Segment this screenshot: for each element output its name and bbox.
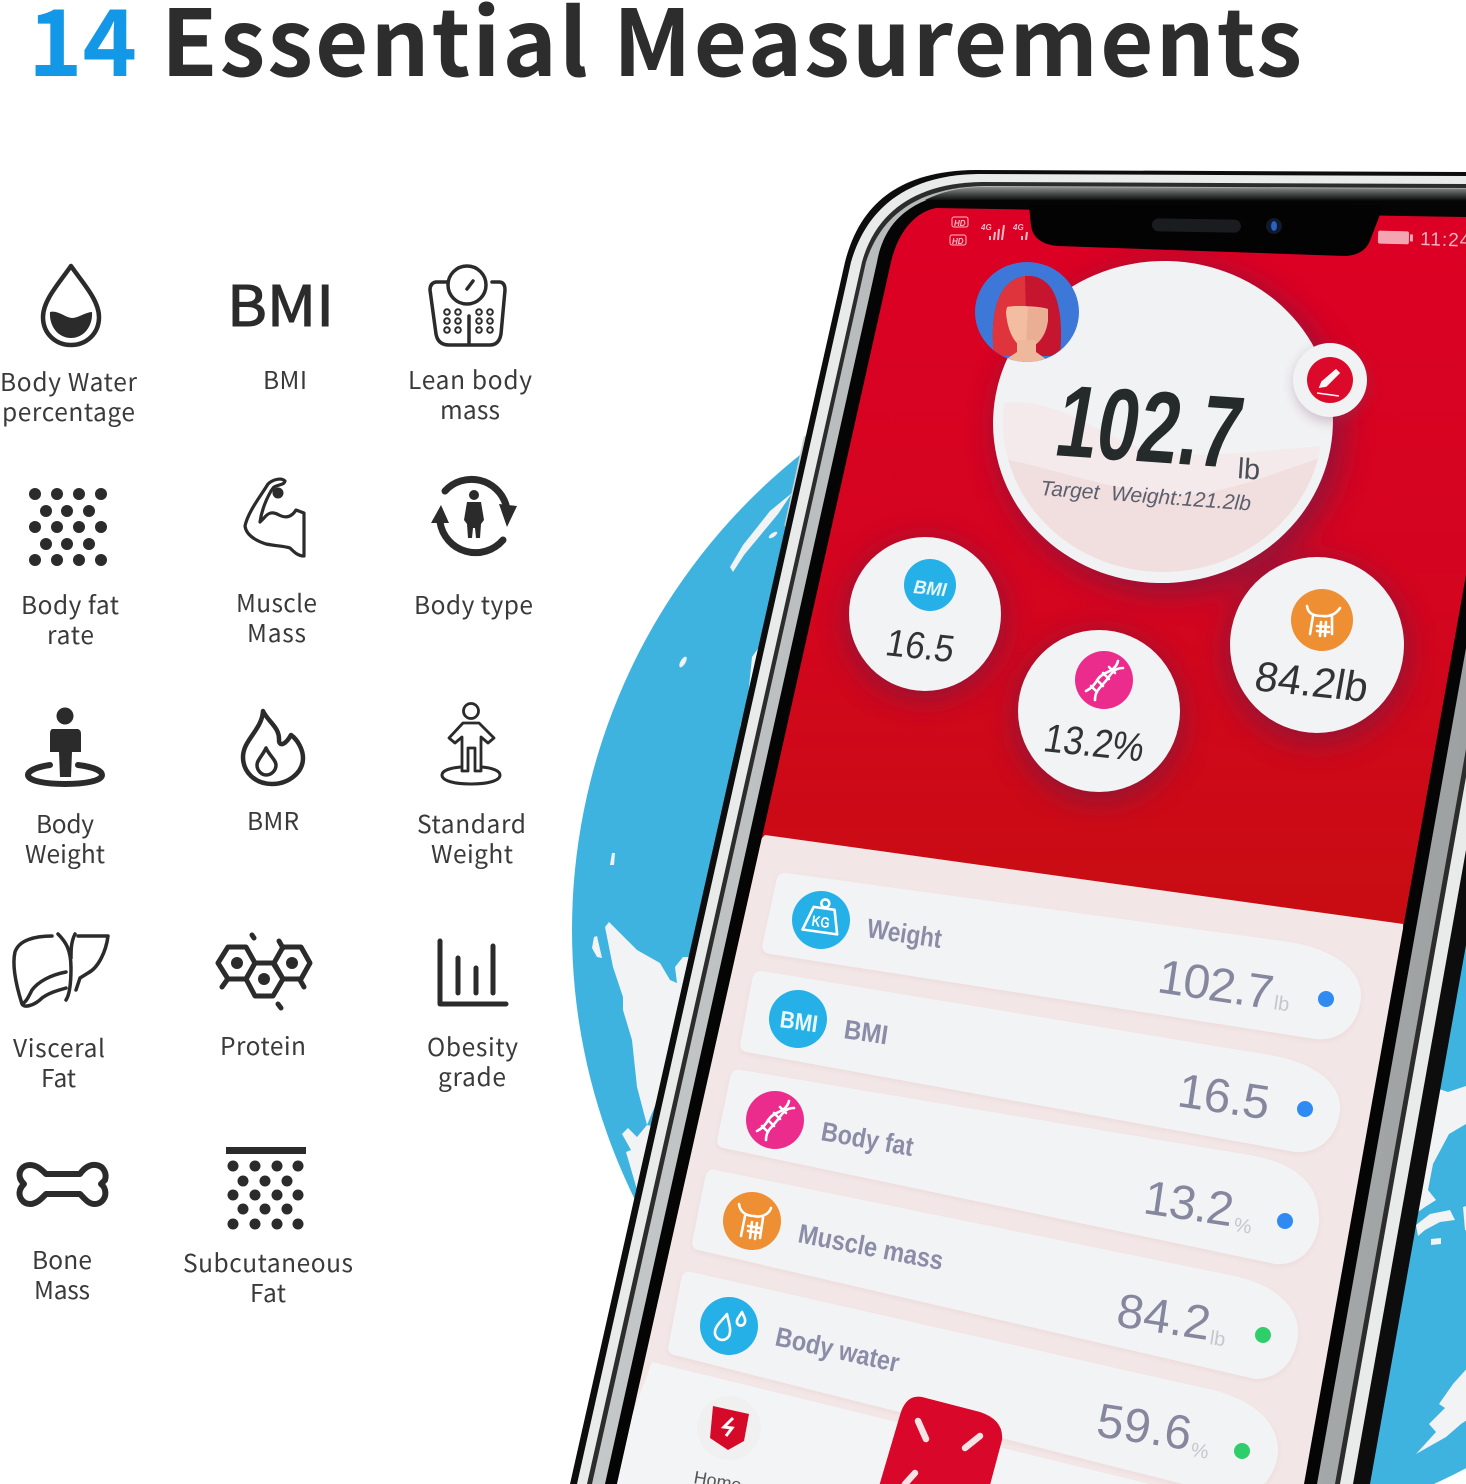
status icons left: 4G <box>1012 223 1024 232</box>
measurement: bone mass: Mass <box>34 1272 90 1307</box>
avatar <box>975 262 1079 362</box>
measurement: muscle mass <box>236 479 317 650</box>
torso icon <box>1307 606 1340 636</box>
icon: outlined person on ring <box>442 704 500 784</box>
measurement: standard weight: Standard <box>417 806 526 841</box>
status icons left: 4G <box>980 223 992 232</box>
measurement: bone mass: Bone <box>32 1242 92 1277</box>
row: body water: Body water <box>773 1322 903 1378</box>
measurement: body weight: Weight <box>25 836 105 871</box>
dna icon <box>1086 661 1123 700</box>
measurement: bone mass <box>20 1165 106 1307</box>
weight value: 102.7 <box>1048 363 1251 489</box>
measurement: subcutaneous fat <box>183 1147 353 1310</box>
measurement: visceral fat <box>13 934 108 1095</box>
icon: hexagons <box>218 935 310 1008</box>
measurement: obesity grade: grade <box>438 1059 506 1094</box>
row: muscle mass: 84.2 <box>1113 1284 1214 1351</box>
row: muscle mass <box>692 1170 1298 1381</box>
icon: water drop <box>43 266 99 345</box>
row: body water <box>668 1272 1278 1484</box>
icon: scale <box>430 266 505 345</box>
measurement: muscle mass: Muscle <box>236 585 317 620</box>
measurement: lean body mass: Lean body <box>408 362 532 397</box>
icon: rotating arrows with person <box>431 479 517 553</box>
measurement: lean body mass <box>408 266 532 427</box>
main weight circle <box>993 261 1333 583</box>
icon: bar over dots <box>226 1147 306 1230</box>
stat circle: muscle: 84.2lb <box>1251 653 1372 711</box>
measurement: body type: Body type <box>414 587 533 622</box>
measurement: obesity grade: Obesity <box>427 1029 518 1064</box>
side buttons <box>760 345 829 652</box>
icon: fat dots <box>29 488 107 566</box>
measurement: BMI: BMI <box>263 362 307 397</box>
icon: flame <box>243 711 303 784</box>
measurement: visceral fat: Fat <box>41 1060 76 1095</box>
measurement: subcutaneous fat: Subcutaneous <box>183 1245 353 1280</box>
row: BMI: BMI <box>778 1006 820 1038</box>
stat circle: BMI <box>849 537 1001 691</box>
measurement: body fat rate: Body fat <box>21 587 119 622</box>
measurement: BMR <box>243 711 303 838</box>
red header background <box>734 208 1466 960</box>
continents <box>592 493 1466 1454</box>
icon: bar chart <box>440 941 506 1004</box>
status icons left <box>950 217 1027 246</box>
row: body water: % <box>1189 1439 1210 1464</box>
unit: lb <box>1237 453 1261 487</box>
icon: person on ring <box>28 708 102 784</box>
row: BMI: BMI <box>842 1014 890 1050</box>
kg icon: KG <box>811 913 831 932</box>
stat circle: BMI: BMI <box>912 577 948 601</box>
lower list background <box>600 835 1403 1484</box>
icon: BMI letters: BMI <box>227 262 334 343</box>
row: muscle mass: lb <box>1208 1327 1227 1351</box>
row: body water: 59.6 <box>1093 1394 1195 1461</box>
stat circle: muscle <box>1230 557 1404 733</box>
measurement: body water percentage <box>0 266 137 429</box>
measurement: standard weight: Weight <box>431 836 513 871</box>
scale button <box>875 1397 1002 1484</box>
measurement: body weight: Body <box>36 806 94 841</box>
measurement: visceral fat: Visceral <box>13 1030 105 1065</box>
kg icon <box>802 897 842 934</box>
globe <box>572 455 1466 1484</box>
phone body <box>570 170 1466 1484</box>
icon: flexed arm <box>245 479 304 556</box>
row: body fat: Body fat <box>819 1116 916 1162</box>
measurement: obesity grade <box>427 941 518 1094</box>
measurement: standard weight <box>417 704 526 871</box>
phone screen <box>600 200 1466 1484</box>
status icons left: HD <box>954 219 966 228</box>
icon: bone <box>20 1165 106 1204</box>
top bezel shading <box>925 187 1466 201</box>
row: body fat: 13.2 <box>1140 1171 1237 1237</box>
stat circle: BMI: 16.5 <box>882 623 958 671</box>
row: weight: Weight <box>865 913 944 954</box>
camera <box>1266 218 1282 234</box>
notch <box>1029 205 1382 256</box>
dna icon <box>757 1101 794 1140</box>
row: body fat: % <box>1232 1214 1253 1239</box>
measurement: body fat rate <box>21 488 119 652</box>
status icons left: HD <box>952 237 964 246</box>
measurement: muscle mass: Mass <box>247 615 306 650</box>
measurement: body type <box>414 479 533 622</box>
list panel <box>668 873 1361 1484</box>
title <box>28 0 1302 103</box>
soft halos <box>845 265 1409 803</box>
status bar <box>950 216 1466 246</box>
speaker <box>1152 218 1241 233</box>
pencil icon <box>1317 370 1339 396</box>
home icon <box>694 1406 749 1484</box>
bottom navigation <box>617 1362 1148 1484</box>
battery <box>1378 231 1413 244</box>
droplets icon <box>715 1312 745 1340</box>
icon: liver <box>14 934 108 1006</box>
torso icon <box>739 1204 771 1239</box>
measurement: body water percentage: Body Water <box>0 364 137 399</box>
edit button <box>1293 343 1370 422</box>
row: weight: 102.7 <box>1154 950 1277 1020</box>
measurement: BMR: BMR <box>247 803 299 838</box>
measurement: body weight <box>25 708 105 871</box>
stat circle: body fat <box>1018 630 1180 792</box>
wave fill <box>1003 402 1320 572</box>
measurement: protein <box>218 935 310 1063</box>
row: BMI: 16.5 <box>1174 1064 1273 1130</box>
measurement: body water percentage: percentage <box>2 394 135 429</box>
row: body fat <box>717 1070 1319 1266</box>
measurement: lean body mass: mass <box>440 392 500 427</box>
target weight: Target Weight:121.2lb <box>1040 477 1252 515</box>
measurement: body fat rate: rate <box>47 617 94 652</box>
measurement: protein: Protein <box>220 1028 306 1063</box>
row: BMI <box>740 971 1340 1154</box>
stat circle: body fat: 13.2% <box>1040 717 1148 770</box>
measurement: BMI <box>227 262 334 397</box>
row: muscle mass: Muscle mass <box>796 1218 946 1276</box>
row: weight <box>762 873 1361 1041</box>
measurement: subcutaneous fat: Fat <box>250 1275 286 1310</box>
row: weight: lb <box>1272 992 1291 1016</box>
